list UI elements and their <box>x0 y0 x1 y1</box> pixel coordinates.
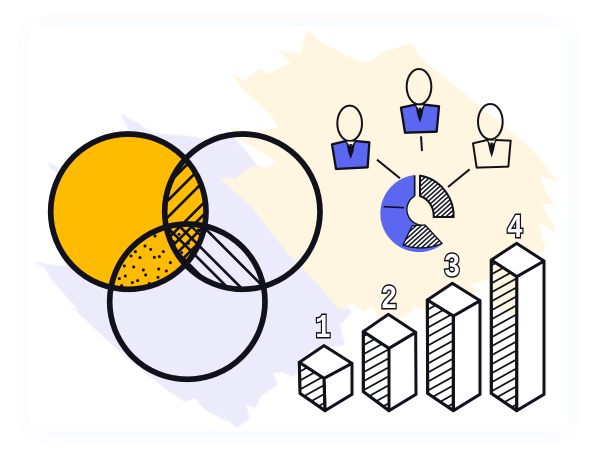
left circle yellow fill <box>51 134 206 289</box>
brush streak: lavender left <box>47 162 60 174</box>
triple overlap extra hatch <box>192 227 200 236</box>
donut hatched bottom segment <box>403 225 442 248</box>
bar 4 <box>491 243 544 411</box>
bar 2 <box>363 314 416 411</box>
bar chart <box>299 243 544 411</box>
connector lines <box>377 136 470 187</box>
person right <box>473 104 511 168</box>
hatch: right and bottom overlap <box>170 227 260 286</box>
bar 1 <box>299 346 352 411</box>
venn diagram <box>51 134 320 379</box>
person middle <box>401 69 439 133</box>
person left <box>332 106 369 169</box>
donut blue segment <box>380 175 443 252</box>
number 3: 3 <box>444 250 460 287</box>
brush stroke: cream <box>220 30 558 318</box>
card background <box>28 26 568 431</box>
number 2: 2 <box>381 282 397 319</box>
stipple dots <box>118 228 200 287</box>
number labels <box>315 211 523 347</box>
circle outlines <box>51 134 320 379</box>
number 4: 4 <box>507 211 523 248</box>
hatch: left and right overlap <box>168 164 204 258</box>
number 1: 1 <box>315 309 331 347</box>
people and donut group <box>332 69 511 252</box>
brush stroke: lavender <box>33 113 352 428</box>
donut hatched top segment <box>420 176 454 217</box>
bar 3 <box>427 283 480 411</box>
donut chart <box>380 175 454 252</box>
